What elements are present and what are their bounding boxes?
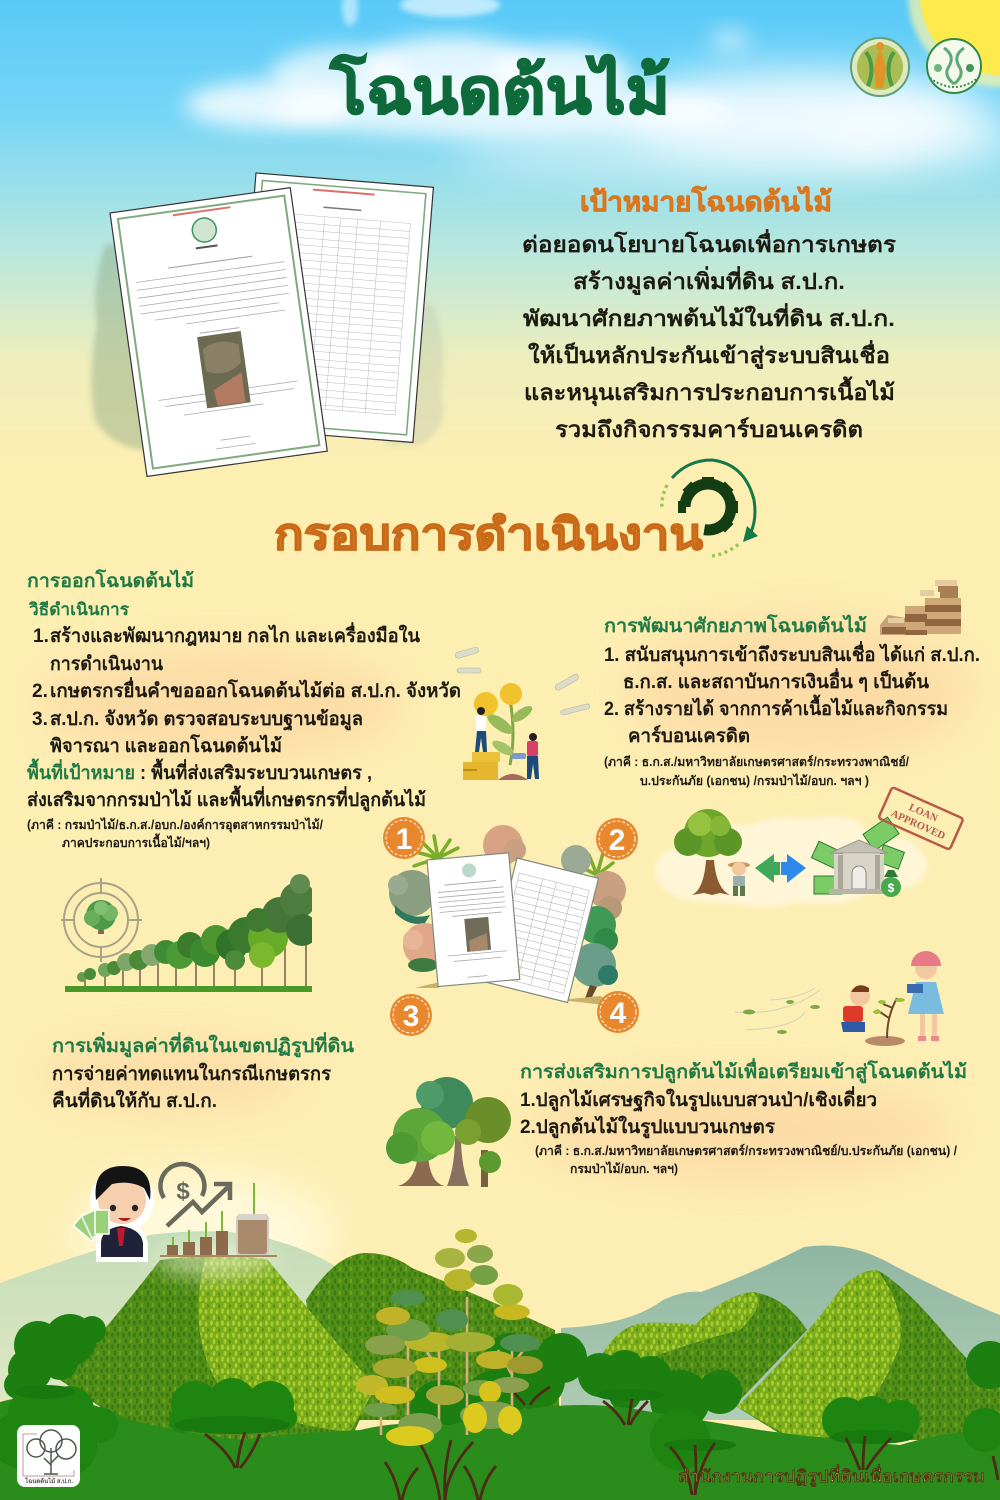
number badge 3 (390, 994, 432, 1036)
number badge 1: 1 (396, 823, 412, 856)
hill: center right lit top (603, 1292, 759, 1370)
pale glow behind finance icons (75, 1175, 335, 1295)
icon: banknotes (811, 817, 904, 894)
partners note: (ภาคี : กรมป่าไม้/ธ.ก.ส./อบก./องค์การอุตสาหกรรมป่าไม้/ (27, 817, 323, 833)
icon: coin stacks with sprouts (160, 1183, 277, 1257)
sun (908, 0, 1000, 87)
footer: agency name: สำนักงานการปฏิรูปที่ดินเพื่อเกษตรกรรม (678, 1464, 985, 1488)
icon: growth arrow and coin (160, 1164, 230, 1226)
document: page 2 table (235, 173, 433, 442)
hill: large left (60, 1256, 376, 1440)
panel: tree planting promotion (520, 1058, 967, 1176)
text block: goals: สร้างมูลค่าเพิ่มที่ดิน ส.ป.ก. (573, 265, 845, 296)
logo: left emblem (851, 38, 909, 96)
list: 2.ปลูกต้นไม้ในรูปแบบวนเกษตร (520, 1115, 776, 1139)
icon: flying money and plant growth (455, 647, 590, 780)
numbered steps: 2. (32, 681, 48, 702)
agency logos (851, 38, 981, 96)
chart: tree growth row (65, 865, 338, 992)
icon: money bag (881, 870, 901, 897)
subheading: วิธีดำเนินการ (28, 600, 129, 619)
partners note: ภาคประกอบการเนื้อไม้/ฯลฯ) (62, 833, 210, 850)
watercolor trees behind documents (91, 240, 444, 450)
number badge 4 (597, 991, 639, 1033)
hill: large left lit side (198, 1256, 376, 1432)
body text: การจ่ายค่าทดแทนในกรณีเกษตรกร (52, 1062, 332, 1085)
ground mass (0, 1396, 1000, 1500)
numbered steps: เกษตรกรยื่นคำขอออกโฉนดต้นไม้ต่อ ส.ป.ก. จังหวัด (50, 677, 461, 702)
hill: middle left (306, 1253, 560, 1420)
small document 2 (486, 858, 599, 1003)
small document 1 (427, 853, 520, 987)
partners note: (ภาคี : ธ.ก.ส./มหาวิทยาลัยเกษตรศาสตร์/กระทรวงพาณิชย์/ (604, 754, 909, 769)
hills with leaf texture (60, 1242, 1000, 1440)
icon: bank building (829, 840, 889, 894)
list: 1. สนับสนุนการเข้าถึงระบบสินเชื่อ ได้แก่ ส.ป.ก. (604, 641, 980, 667)
numbered steps: ส.ป.ก. จังหวัด ตรวจสอบระบบฐานข้อมูล (50, 708, 363, 732)
document: page 1 certificate (110, 188, 327, 476)
number badge 1 (383, 817, 425, 859)
heading: การส่งเสริมการปลูกต้นไม้เพื่อเตรียมเข้าสู่โฉนดต้นไม้ (520, 1058, 967, 1084)
white cloud backdrop (655, 816, 928, 907)
numbered steps: สร้างและพัฒนากฎหมาย กลไก และเครื่องมือใน (50, 622, 420, 647)
list (604, 641, 980, 747)
mountain: slate right (561, 1245, 1000, 1420)
partners note (535, 1143, 958, 1176)
icon: wooden blocks (880, 580, 961, 635)
partners note: บ.ประกันภัย (เอกชน) /กรมป่าไม้/อบก. ฯลฯ ) (640, 773, 869, 788)
title: โฉนดต้นไม้ (329, 53, 670, 127)
text block: goals: พัฒนาศักยภาพต้นไม้ในที่ดิน ส.ป.ก. (523, 302, 895, 331)
partners note: กรมป่าไม้/อบก. ฯลฯ) (570, 1161, 678, 1176)
heading: การพัฒนาศักยภาพโฉนดต้นไม้ (604, 614, 867, 637)
olive yellow trees (356, 1229, 543, 1446)
text block: goals: รวมถึงกิจกรรมคาร์บอนเครดิต (555, 417, 863, 442)
partners note (604, 754, 909, 788)
icon: banknote fan (73, 1210, 109, 1241)
target area: พื้นที่เป้าหมาย (27, 758, 135, 784)
icon: gear with cycle arrows (662, 460, 758, 556)
logo: deed tree badge (17, 1425, 80, 1487)
icon: tree (674, 809, 742, 895)
number badge 3: 3 (403, 1000, 419, 1033)
center illustration: deed documents with trees (388, 825, 628, 1008)
hill: large right (737, 1270, 1000, 1440)
text block: goals: และหนุนเสริมการประกอบการเนื้อไม้ (524, 376, 895, 407)
panel: land value increase (52, 1032, 354, 1112)
stamp: loan approved (878, 787, 963, 850)
panel: tree deed issuance (27, 569, 461, 850)
stamp: loan approved: LOAN (907, 802, 940, 825)
icon: exchange arrows (755, 854, 806, 883)
icon: businessman (90, 1166, 154, 1262)
numbered steps (32, 622, 461, 757)
logo: right emblem (927, 39, 981, 93)
haze on left hilltop (155, 1242, 275, 1278)
numbered steps: พิจารณา และออกโฉนดต้นไม้ (50, 734, 282, 757)
icon: money bag: $ (888, 881, 895, 895)
text block: goals: ให้เป็นหลักประกันเข้าสู่ระบบสินเชื่อ (528, 339, 890, 370)
number badge 2: 2 (609, 824, 625, 857)
orange paint blotches (40, 620, 970, 1180)
icon: farmer (728, 862, 750, 896)
numbered steps: การดำเนินงาน (50, 654, 163, 675)
body text: คืนที่ดินให้กับ ส.ป.ก. (52, 1087, 217, 1112)
target and tree row illustration (61, 865, 338, 992)
tree branches (205, 1387, 998, 1500)
trees around documents (388, 825, 628, 1008)
hill: large right lit side (737, 1270, 901, 1437)
numbered steps: 3. (32, 709, 48, 730)
list: 2. สร้างรายได้ จากการค้าเนื้อไม้และกิจกรรม (604, 694, 948, 720)
list: 1.ปลูกไม้เศรษฐกิจในรูปแบบสวนป่า/เชิงเดี่ยว (520, 1086, 877, 1113)
panel: deed potential development (604, 614, 980, 788)
dollar sign: $ (176, 1178, 190, 1205)
logo: deed tree badge: โฉนดต้นไม้ ส.ป.ก. (24, 1477, 73, 1485)
heading: goals: เป้าหมายโฉนดต้นไม้ (580, 185, 832, 217)
hill: center right (603, 1292, 807, 1400)
number badge 4: 4 (610, 997, 627, 1030)
finance icons on hill (73, 1164, 277, 1262)
text block: goals: ต่อยอดนโยบายโฉนดเพื่อการเกษตร (522, 228, 896, 257)
canopy blobs (0, 1378, 1000, 1477)
icon: tree cluster (386, 1077, 511, 1187)
background mountains (0, 1231, 1000, 1420)
target area: ส่งเสริมจากกรมป่าไม้ และพื้นที่เกษตรกรที่ปลูกต้นไม้ (27, 785, 426, 812)
heading: framework: กรอบการดำเนินงาน (274, 511, 704, 559)
heading: การออกโฉนดต้นไม้ (27, 569, 194, 592)
mountain: pale left (0, 1231, 345, 1420)
icon: target with tree (61, 878, 142, 962)
list (520, 1086, 877, 1139)
stamp: loan approved: APPROVED (889, 808, 947, 842)
partners note: (ภาคี : ธ.ก.ส./มหาวิทยาลัยเกษตรศาสตร์/กระทรวงพาณิชย์/บ.ประกันภัย (เอกชน) / (535, 1143, 958, 1158)
clouds (185, 0, 1000, 176)
target area: : พื้นที่ส่งเสริมระบบวนเกษตร , (140, 758, 372, 784)
target area (27, 758, 426, 812)
list: ธ.ก.ส. และสถาบันการเงินอื่น ๆ เป็นต้น (623, 668, 929, 693)
partners note (27, 817, 323, 850)
loan illustration: tree, farmer, arrows, bank (655, 787, 963, 907)
text block: goals (522, 228, 896, 442)
list: คาร์บอนเครดิต (628, 725, 750, 747)
canopy shade (15, 1385, 914, 1451)
number badge 2 (596, 818, 638, 860)
forest foreground (0, 1314, 1000, 1500)
canopy back layer (4, 1314, 1000, 1440)
body text (52, 1062, 332, 1112)
icon: kids planting tree (735, 951, 944, 1046)
heading: การเพิ่มมูลค่าที่ดินในเขตปฏิรูปที่ดิน (52, 1032, 354, 1058)
numbered steps: 1. (33, 626, 49, 647)
